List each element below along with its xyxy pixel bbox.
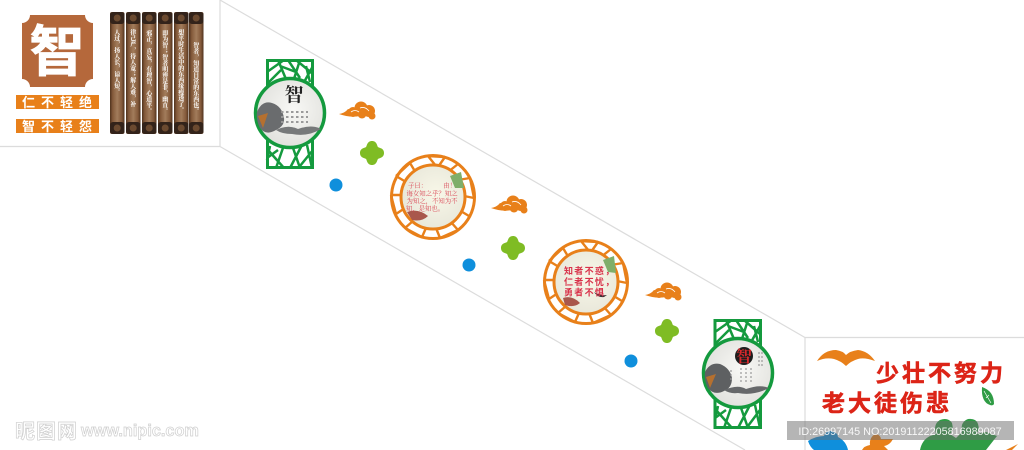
poem lines [731, 352, 762, 382]
icon: orange open book [817, 350, 875, 366]
heading seal in medallion: 智 [736, 344, 752, 367]
poem text: 为知之，不知为不 [406, 196, 458, 205]
orange lattice medallion 1 [391, 156, 474, 238]
watermark bar: ID:26997145 NO:20191122205816989087 [798, 426, 1002, 438]
banner: 仁不轻绝: 仁不轻绝 [22, 92, 98, 111]
motto text: 勇者不惧 [564, 286, 605, 298]
icon: brown plaque with 智: 智 [29, 7, 85, 87]
icon: orange cloud 1 [339, 102, 376, 120]
heading glyph in medallion: 智 [284, 80, 304, 107]
scroll panels with vertical text [110, 12, 204, 134]
scroll 5: 想平时生活中的东西缘瘦透了。 [177, 28, 186, 113]
motto text: 知者不惑， [564, 264, 616, 277]
scroll 6: 智者，知道日常的东西也。 [192, 41, 201, 114]
poem text: 子曰： 由！ [408, 180, 456, 190]
icon: blue figure [808, 431, 848, 450]
icon: green clover 2 [501, 236, 525, 260]
poem lines [281, 112, 308, 122]
blue dot 3 [624, 354, 638, 368]
panel: top-left title block [16, 7, 204, 135]
motto text: 仁者不忧， [564, 275, 616, 288]
green lattice medallion: 省 ink painting [704, 320, 772, 428]
panel: bottom-right motto [808, 350, 1018, 450]
blue dot 2 [462, 258, 476, 272]
blue dot 1 [330, 178, 342, 192]
watermark bar [787, 421, 1014, 440]
watermark: nipic logo: www.nipic.com [80, 422, 199, 440]
poem text [406, 180, 458, 212]
icon: green clover 1 [360, 141, 384, 165]
motto text [564, 264, 616, 298]
watermark: nipic logo [15, 421, 199, 443]
motto line 1: 少壮不努力 [876, 360, 1006, 386]
scroll 3: 邪正，真妄，有理智，心道平。 [145, 29, 154, 114]
orange lattice medallion 2 [544, 240, 628, 324]
green lattice medallion: 智 ink painting [256, 60, 324, 168]
motto line 2: 老大徒伤悲 [822, 390, 952, 416]
scroll 1: 人过，扬人长，谅人短。 [113, 29, 122, 95]
icon: orange flower [862, 434, 893, 450]
icon: green clover 3 [655, 319, 679, 343]
banner: 智不轻怨: 智不轻怨 [22, 116, 98, 135]
icon: orange corner shape [1006, 444, 1018, 450]
poem text: 诲女知之乎？知之 [406, 188, 458, 198]
icon: green leaf [982, 387, 994, 405]
watermark: nipic logo: 昵图网 [15, 421, 78, 443]
scroll 2: 律己严，待人宽；解人难，补 [129, 28, 138, 108]
icon: orange cloud 2 [491, 196, 528, 214]
icon: orange cloud 3 [645, 282, 682, 300]
poem text: 知，是知也。 [406, 204, 444, 212]
icon: green children reading [920, 419, 997, 450]
scroll 4: 即为智；智者明辨是非，幽直。 [161, 29, 170, 114]
